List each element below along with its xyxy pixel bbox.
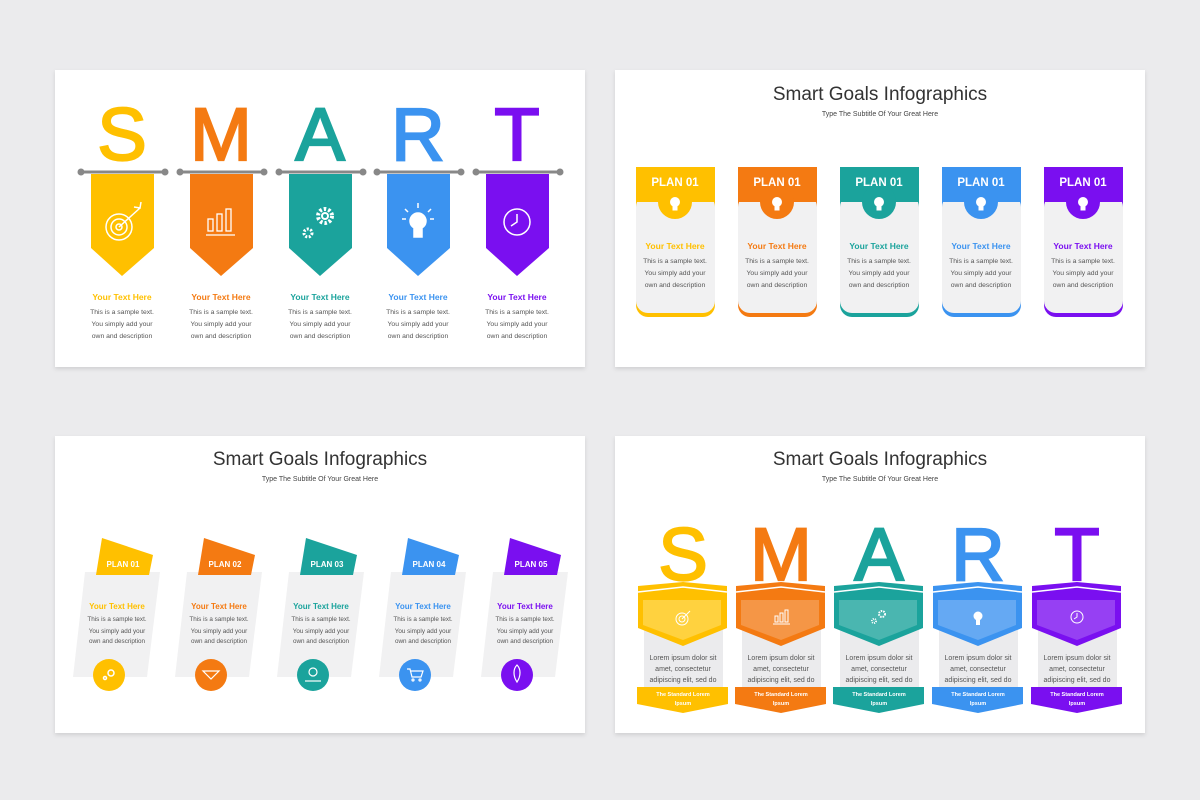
plan 03: You simply add your: [293, 628, 349, 635]
shield M: Ipsum: [773, 701, 789, 707]
column T: own and description: [487, 333, 547, 340]
column T: [472, 93, 564, 340]
plan 02: This is a sample text.: [189, 616, 249, 623]
column S: [78, 93, 168, 340]
shield R: R: [951, 513, 1005, 596]
shield R: The Standard Lorem: [951, 692, 1005, 698]
card 5: PLAN 01: [1059, 177, 1107, 189]
plan 05: This is a sample text.: [495, 616, 555, 623]
shield T: Lorem ipsum dolor sit: [1044, 655, 1111, 662]
card 4: This is a sample text.: [949, 258, 1013, 265]
card 4: PLAN 01: [957, 177, 1005, 189]
column R: This is a sample text.: [386, 309, 450, 316]
shield S: [637, 513, 728, 713]
column T: T: [494, 93, 540, 176]
column A: A: [295, 93, 345, 176]
shield A: The Standard Lorem: [852, 692, 906, 698]
shield S: amet, consectetur: [655, 666, 711, 673]
card 5: You simply add your: [1053, 270, 1114, 277]
plan 02: You simply add your: [191, 628, 247, 635]
plan 02: own and description: [191, 638, 247, 645]
heading: Smart Goals Infographics: [213, 449, 427, 470]
card 1: You simply add your: [645, 270, 706, 277]
card 1: Your Text Here: [645, 241, 705, 251]
card 5: [1044, 167, 1123, 317]
plan 05: PLAN 05: [515, 560, 548, 569]
plan 04: You simply add your: [395, 628, 451, 635]
column A: This is a sample text.: [288, 309, 352, 316]
column R: You simply add your: [388, 321, 449, 328]
column R: R: [391, 93, 445, 176]
card 5: Your Text Here: [1053, 241, 1113, 251]
shield A: [833, 513, 924, 713]
card 2: PLAN 01: [753, 177, 801, 189]
panel: plan cards: Type The Subtitle Of Your Great Here: [822, 111, 938, 118]
column R: [374, 93, 464, 340]
column S: S: [97, 93, 147, 176]
column S: This is a sample text.: [90, 309, 154, 316]
plan 01: This is a sample text.: [87, 616, 147, 623]
column S: own and description: [92, 333, 152, 340]
column A: Your Text Here: [290, 292, 350, 302]
shield A: Ipsum: [871, 701, 887, 707]
plan 05: own and description: [497, 638, 553, 645]
panel: plan cards: [615, 70, 1145, 367]
shield A: A: [854, 513, 904, 596]
plan 02: PLAN 02: [209, 560, 242, 569]
card 4: own and description: [951, 282, 1011, 289]
column M: You simply add your: [191, 321, 252, 328]
column S: You simply add your: [92, 321, 153, 328]
shield T: Ipsum: [1069, 701, 1085, 707]
shield S: Ipsum: [675, 701, 691, 707]
card 2: Your Text Here: [747, 241, 807, 251]
plan 04: Your Text Here: [395, 602, 451, 611]
shield S: adipiscing elit, sed do: [650, 677, 717, 684]
column R: own and description: [388, 333, 448, 340]
shield T: The Standard Lorem: [1050, 692, 1104, 698]
column M: [176, 93, 268, 340]
column M: Your Text Here: [191, 292, 251, 302]
card 5: own and description: [1053, 282, 1113, 289]
plan 05: [481, 538, 568, 691]
plan 05: Your Text Here: [497, 602, 553, 611]
plan 02: [175, 538, 262, 691]
shield A: Lorem ipsum dolor sit: [846, 655, 913, 662]
shield R: adipiscing elit, sed do: [945, 677, 1012, 684]
plan 01: You simply add your: [89, 628, 145, 635]
plan 03: [277, 538, 364, 691]
panel: tilted plan tags: [55, 436, 585, 733]
plan 04: PLAN 04: [413, 560, 446, 569]
card 3: [840, 167, 919, 317]
plan 02: Your Text Here: [191, 602, 247, 611]
shield A: amet, consectetur: [851, 666, 907, 673]
plan 03: own and description: [293, 638, 349, 645]
card 2: own and description: [747, 282, 807, 289]
heading: Smart Goals Infographics: [773, 84, 987, 105]
card 1: This is a sample text.: [643, 258, 707, 265]
shield S: Lorem ipsum dolor sit: [650, 655, 717, 662]
plan 04: own and description: [395, 638, 451, 645]
shield R: [932, 513, 1023, 713]
shield M: Lorem ipsum dolor sit: [748, 655, 815, 662]
column T: This is a sample text.: [485, 309, 549, 316]
column S: Your Text Here: [92, 292, 152, 302]
shield M: amet, consectetur: [753, 666, 809, 673]
card 5: This is a sample text.: [1051, 258, 1115, 265]
column T: You simply add your: [487, 321, 548, 328]
card 3: Your Text Here: [849, 241, 909, 251]
plan 03: Your Text Here: [293, 602, 349, 611]
shield S: The Standard Lorem: [656, 692, 710, 698]
card 1: PLAN 01: [651, 177, 699, 189]
panel: SMART shields: [615, 436, 1145, 733]
heading: Smart Goals Infographics: [773, 449, 987, 470]
plan 05: You simply add your: [497, 628, 553, 635]
plan 01: Your Text Here: [89, 602, 145, 611]
column M: This is a sample text.: [189, 309, 253, 316]
shield T: [1031, 513, 1122, 713]
card 2: You simply add your: [747, 270, 808, 277]
panel: tilted plan tags: Type The Subtitle Of Your Great Here: [262, 476, 378, 483]
column R: Your Text Here: [388, 292, 448, 302]
plan 03: This is a sample text.: [291, 616, 351, 623]
plan 04: This is a sample text.: [393, 616, 453, 623]
plan 01: own and description: [89, 638, 145, 645]
column A: [276, 93, 366, 340]
card 1: [636, 167, 715, 317]
card 3: own and description: [849, 282, 909, 289]
plan 01: PLAN 01: [107, 560, 140, 569]
card 4: Your Text Here: [951, 241, 1011, 251]
shield T: amet, consectetur: [1049, 666, 1105, 673]
card 4: You simply add your: [951, 270, 1012, 277]
plan 03: PLAN 03: [311, 560, 344, 569]
card 3: You simply add your: [849, 270, 910, 277]
column T: Your Text Here: [487, 292, 547, 302]
shield R: amet, consectetur: [950, 666, 1006, 673]
plan 04: [379, 538, 466, 691]
shield S: S: [658, 513, 708, 596]
panel: SMART shields: Type The Subtitle Of Your Great Here: [822, 476, 938, 483]
column A: own and description: [290, 333, 350, 340]
shield M: [735, 513, 826, 713]
column A: You simply add your: [290, 321, 351, 328]
card 1: own and description: [645, 282, 705, 289]
shield R: Ipsum: [970, 701, 986, 707]
panel: SMART banners: [55, 70, 585, 367]
card 3: This is a sample text.: [847, 258, 911, 265]
plan 01: [73, 538, 160, 691]
shield M: adipiscing elit, sed do: [748, 677, 815, 684]
shield A: adipiscing elit, sed do: [846, 677, 913, 684]
shield T: T: [1054, 513, 1100, 596]
card 2: [738, 167, 817, 317]
card 3: PLAN 01: [855, 177, 903, 189]
shield M: M: [750, 513, 812, 596]
card 4: [942, 167, 1021, 317]
column M: M: [190, 93, 252, 176]
shield M: The Standard Lorem: [754, 692, 808, 698]
shield R: Lorem ipsum dolor sit: [945, 655, 1012, 662]
card 2: This is a sample text.: [745, 258, 809, 265]
shield T: adipiscing elit, sed do: [1044, 677, 1111, 684]
column M: own and description: [191, 333, 251, 340]
